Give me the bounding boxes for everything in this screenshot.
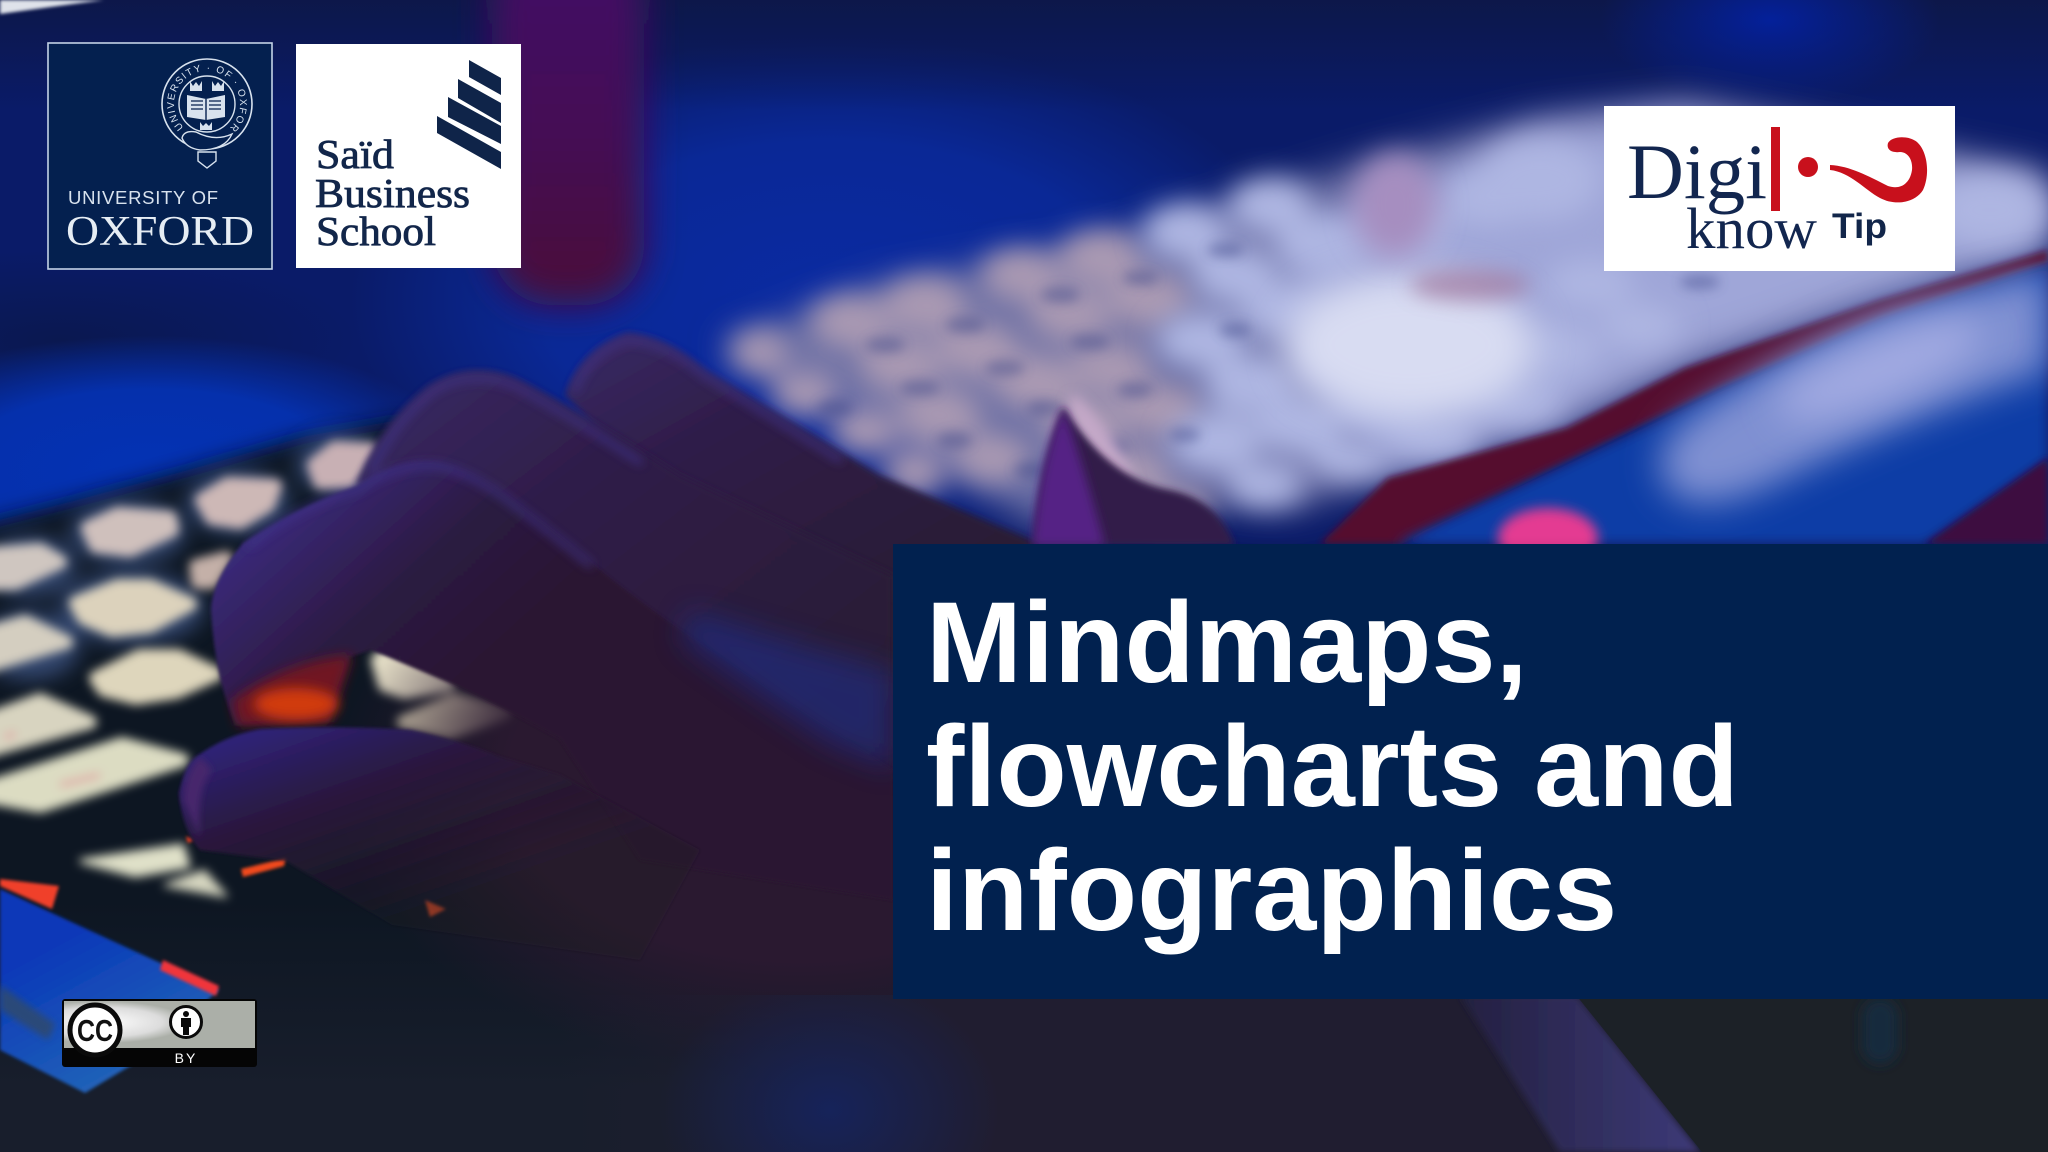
blurred keyboard, top right <box>720 100 2048 530</box>
text: Said Business School: School <box>316 208 436 254</box>
title <box>926 579 1739 955</box>
blue light on front finger <box>680 610 893 770</box>
text: know: know <box>1686 196 1817 261</box>
purple-maroon blurred band behind logos <box>492 0 644 305</box>
logo: Digiknow Tip <box>1604 106 1955 271</box>
text: Said Business School: Business <box>315 170 470 216</box>
icon: red bar <box>1771 127 1780 211</box>
purple thumb, blurred <box>1033 395 1235 546</box>
pink glow spot <box>1498 508 1598 568</box>
title: flowcharts and <box>926 703 1739 831</box>
soft halo around upper keys <box>0 434 384 680</box>
badge: Creative Commons BY <box>62 999 257 1067</box>
logo: University of Oxford <box>47 42 273 270</box>
icon: attribution person <box>170 1006 202 1038</box>
blue key bottom left <box>0 836 446 1093</box>
front finger <box>211 461 893 900</box>
red fingertip glow <box>232 655 352 726</box>
logo: Said Business School <box>296 44 521 268</box>
text: BY: BY <box>175 1050 197 1066</box>
red keyboard edge <box>1320 250 2048 544</box>
lower finger <box>179 727 700 960</box>
text: Said Business School: Saïd <box>316 131 394 177</box>
middle finger <box>356 370 893 780</box>
backlit keys, left <box>0 448 506 896</box>
icon: CC circle <box>70 1005 120 1055</box>
forearm below title panel <box>560 995 2048 1152</box>
icon: CC circle: CC <box>77 1013 113 1048</box>
panel: title background <box>893 544 2048 999</box>
icon: red dot <box>1798 157 1818 177</box>
icon: Oxford seal <box>161 58 253 169</box>
text: Digi: Digi <box>1627 128 1767 215</box>
lavender blurred highlight, right <box>1395 268 2048 544</box>
text: Said Business School <box>315 131 470 254</box>
dark lower area <box>0 420 2048 1152</box>
text: Tip: Tip <box>1832 207 1887 246</box>
text: UNIVERSITY OF: UNIVERSITY OF <box>68 187 218 208</box>
knuckle highlights <box>250 340 840 565</box>
icon: Said stairs mark <box>437 60 501 169</box>
back finger <box>565 333 1043 600</box>
palm <box>320 480 893 1152</box>
title: Mindmaps, <box>926 579 1528 707</box>
hand <box>179 333 1043 1152</box>
icon: red swoosh <box>1830 137 1927 202</box>
text: OXFORD: OXFORD <box>66 208 254 255</box>
title: infographics <box>926 827 1617 955</box>
